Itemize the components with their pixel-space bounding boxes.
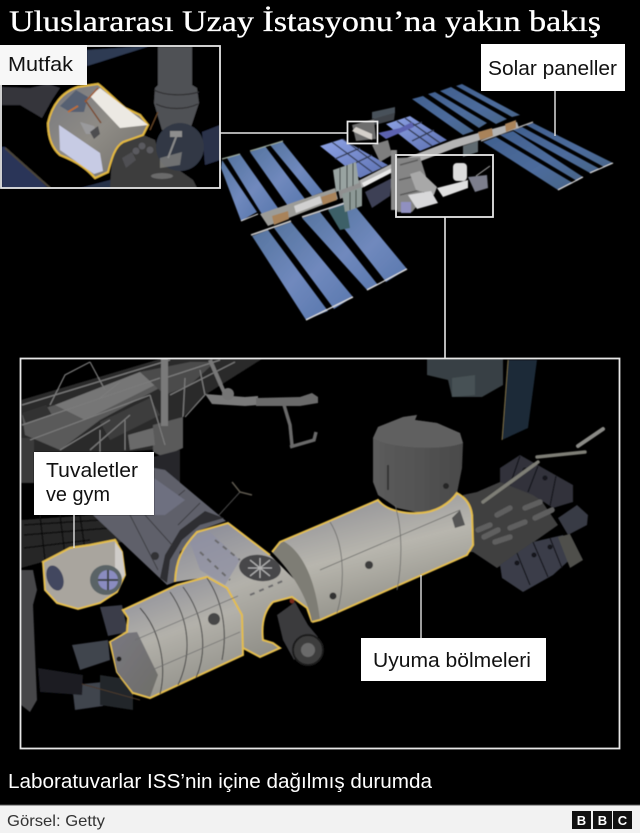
label: solar panels	[481, 44, 625, 91]
solar panels: right upper wing	[412, 84, 520, 135]
central node outlined in yellow	[175, 523, 315, 657]
truss framework	[21, 358, 318, 488]
logistics pallet	[463, 429, 603, 592]
solar panels: centre lavender arrays	[320, 107, 447, 178]
label: toilets and gym	[34, 452, 154, 515]
BBC logo: B	[577, 813, 586, 828]
label: solar panels: Solar paneller	[488, 58, 617, 80]
label: sleeping quarters	[361, 638, 546, 681]
solar panels: left lower wing	[251, 200, 407, 320]
dark grid platform	[21, 515, 130, 568]
label: sleeping quarters: Uyuma bölmeleri	[373, 650, 531, 672]
label: kitchen	[0, 45, 87, 85]
sleeping module outlined in yellow	[272, 493, 473, 622]
front cylinder module outlined in yellow	[110, 577, 243, 698]
radiator blocks	[333, 140, 478, 212]
connector: highlight box to enlarged view	[444, 217, 446, 359]
label: kitchen: Mutfak	[8, 54, 74, 76]
BBC logo: C	[618, 813, 628, 828]
toilet and gym module detail	[43, 540, 125, 609]
connector: solar panels label	[554, 90, 556, 136]
connector: sleeping label	[420, 575, 422, 638]
footer	[0, 805, 640, 833]
footer: Görsel: Getty	[7, 813, 105, 830]
panel: kitchen inset	[0, 45, 220, 188]
docking port	[277, 598, 323, 665]
kitchen module outlined	[48, 84, 148, 178]
solar panels: left upper wing	[221, 141, 323, 221]
highlight box: enlarged section location	[396, 155, 493, 217]
solar panels: right lower wing	[481, 122, 613, 190]
connector: toilets label	[73, 515, 75, 548]
caption: Laboratuvarlar ISS’nin içine dağılmış durumda	[8, 771, 433, 793]
central modules	[352, 119, 490, 213]
label: toilets and gym: Tuvaletler	[46, 460, 138, 482]
BBC logo	[572, 811, 632, 829]
cupola-like dark module	[372, 438, 464, 513]
highlight box: kitchen location	[348, 122, 378, 144]
upper right equipment	[427, 359, 537, 440]
lower left equipment	[21, 570, 140, 712]
main truss	[260, 120, 519, 226]
connector: kitchen inset to small highlight box	[220, 132, 347, 134]
label: toilets and gym: ve gym	[46, 484, 110, 506]
BBC logo: B	[598, 813, 607, 828]
grey cylinder module	[93, 468, 252, 585]
illustration: space station overview	[221, 84, 613, 320]
panel: enlarged view of living modules	[20, 358, 620, 748]
title: Uluslararası Uzay İstasyonu’na yakın bakış	[9, 5, 601, 38]
